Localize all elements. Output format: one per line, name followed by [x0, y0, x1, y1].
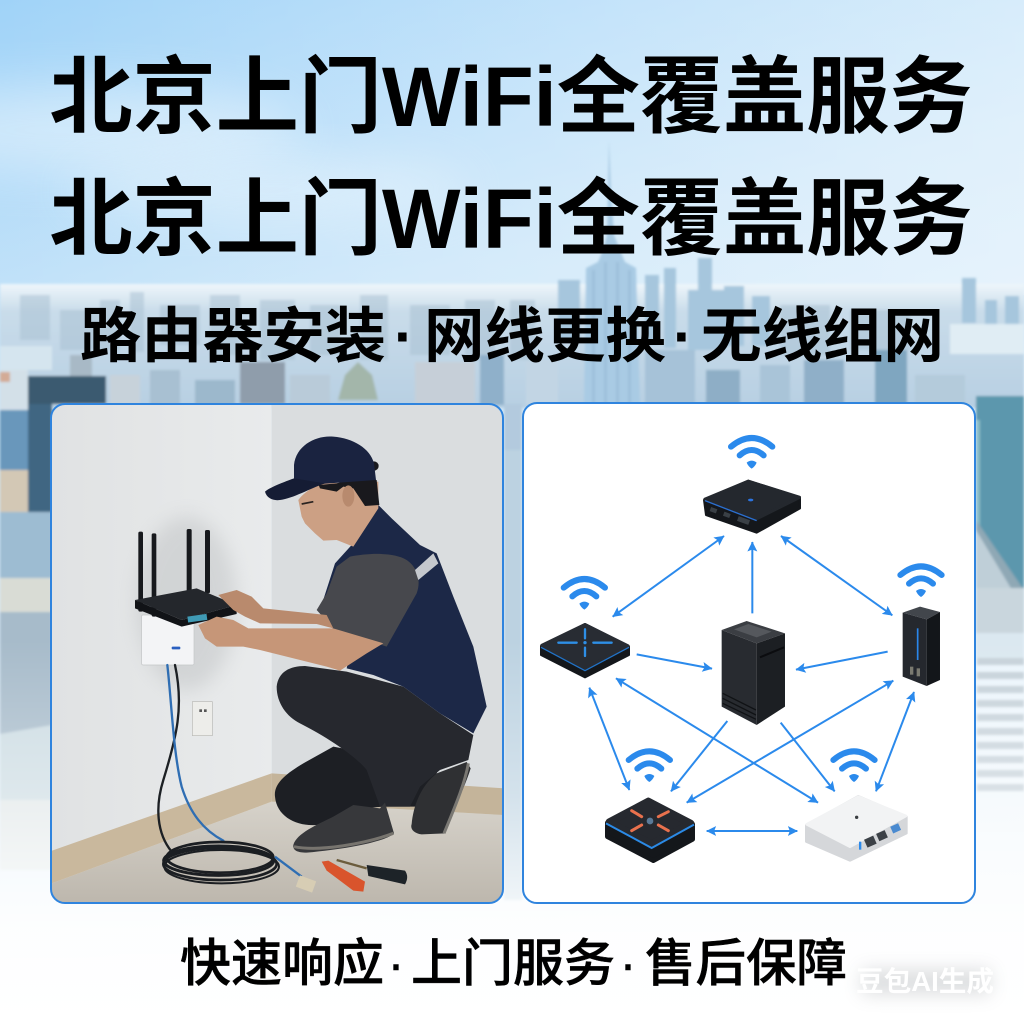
tagline: 售后保障: [645, 935, 847, 992]
skirting board: [50, 773, 272, 884]
walls: [52, 405, 272, 850]
tagline: ·: [388, 935, 404, 992]
subtitle: 无线组网: [701, 303, 944, 370]
technician: [198, 436, 487, 853]
upper arm: [218, 590, 333, 628]
reflective stripe: [415, 553, 438, 580]
neck and face: [298, 482, 378, 547]
river: [0, 346, 52, 370]
wall socket: [192, 702, 212, 736]
device: left router: [541, 624, 629, 677]
subtitle: [80, 303, 944, 370]
device: bottom-right router: [806, 796, 907, 861]
cable connector: [296, 875, 316, 893]
router: [135, 588, 237, 627]
panel: technician installing router: [50, 403, 505, 903]
tagline: 上门服务: [411, 935, 615, 992]
back shoe: [411, 762, 471, 834]
lower row: [70, 355, 92, 385]
network arrows: [589, 536, 914, 831]
subtitle: 网线更换: [424, 303, 666, 370]
cables: [158, 665, 223, 852]
white wall box: [142, 615, 194, 665]
thigh and hips: [277, 666, 473, 807]
right edge buildings: [976, 396, 1024, 588]
tagline: 快速响应: [180, 935, 384, 992]
title line 1: 北京上门WiFi全覆盖服务: [50, 50, 972, 144]
tools: [322, 860, 407, 892]
wifi icons: [564, 438, 942, 782]
gutter building: [504, 404, 522, 450]
device: right tower: [903, 607, 940, 686]
left edge buildings: [0, 370, 28, 410]
cable coil: [163, 842, 302, 883]
subtitle: ·: [673, 303, 693, 370]
device: center tower: [722, 621, 785, 725]
panel: WiFi mesh network diagram: [523, 403, 975, 903]
tower spire: [584, 140, 640, 404]
back leg: [275, 747, 440, 825]
device: top hub: [704, 481, 800, 533]
front shoe: [293, 803, 394, 853]
tagline: ·: [620, 935, 636, 992]
cap: [294, 436, 376, 484]
subtitle: ·: [394, 303, 414, 370]
floor: [50, 802, 503, 903]
forearm: [198, 617, 383, 671]
antennas: [138, 529, 210, 617]
sleeve: [317, 554, 419, 647]
title line 2: 北京上门WiFi全覆盖服务: [50, 172, 972, 266]
subtitle: 路由器安装: [80, 303, 386, 370]
watermark: 豆包AI生成: [856, 966, 994, 997]
device: bottom-left router: [606, 800, 694, 861]
torso: [320, 505, 487, 733]
tagline: [180, 935, 847, 992]
